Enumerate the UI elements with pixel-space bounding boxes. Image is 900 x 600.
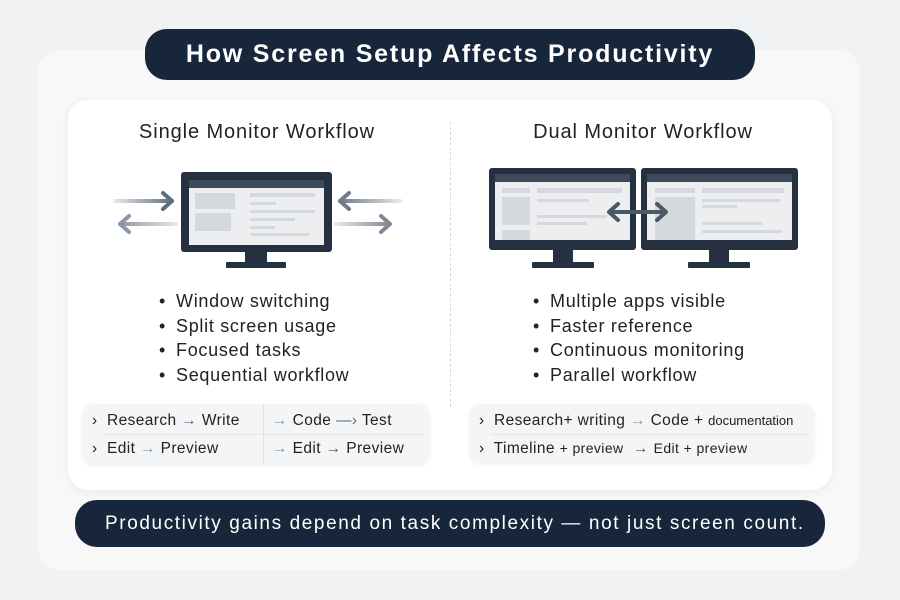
footer callout: Productivity gains depend on task complexity — not just screen count.	[105, 513, 805, 534]
bullets: dual: Parallel workflow	[550, 364, 697, 384]
heading: single: Single Monitor Workflow	[139, 121, 375, 143]
table: single examples: → Code —› Test	[272, 412, 392, 429]
bullets: single: Sequential workflow	[176, 364, 349, 384]
heading: dual: Dual Monitor Workflow	[533, 121, 753, 143]
table: dual examples: › Timeline + preview → Edit + preview	[479, 440, 748, 457]
bullets: dual: Multiple apps visible	[550, 291, 726, 311]
bullets: dual: Continuous monitoring	[550, 340, 745, 360]
bullets: single: Focused tasks	[176, 340, 301, 360]
outer card	[38, 50, 860, 570]
table: single examples: → Edit → Preview	[272, 440, 404, 457]
icon: dual monitors	[489, 168, 798, 268]
table: dual examples	[469, 404, 815, 464]
main card	[68, 100, 832, 490]
bullets: single: Split screen usage	[176, 316, 337, 336]
bullets: single: Window switching	[176, 291, 330, 311]
title: How Screen Setup Affects Productivity	[186, 40, 714, 68]
bullets: single	[160, 291, 349, 385]
footer callout	[75, 500, 825, 547]
bullets: dual	[534, 291, 745, 384]
icon: single monitor with arrows	[113, 172, 402, 268]
table: single examples	[82, 404, 430, 465]
table: dual examples: › Research+ writing → Code + documentation	[479, 412, 793, 429]
divider	[450, 122, 451, 407]
bullets: dual: Faster reference	[550, 316, 693, 336]
table: single examples: › Research → Write	[92, 412, 240, 429]
table: single examples: › Edit → Preview	[92, 440, 219, 457]
title	[145, 29, 755, 80]
